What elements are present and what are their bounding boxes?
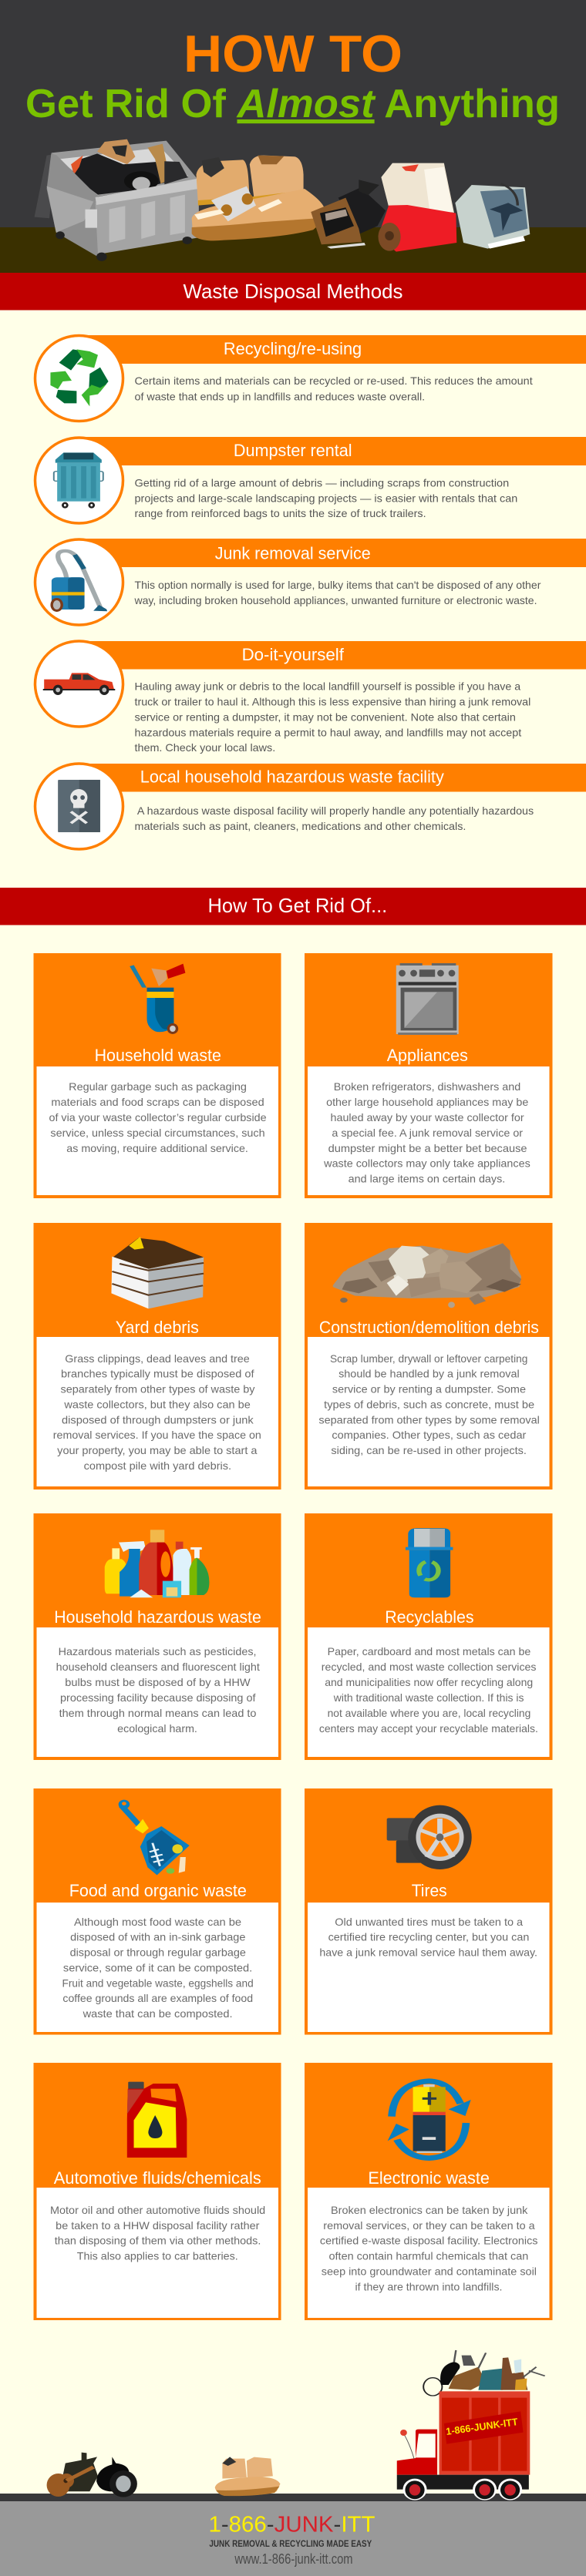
icon: vacuum bbox=[50, 551, 107, 612]
card: recyclables bbox=[305, 1513, 552, 1760]
method text: materials such as paint, cleaners, medications and other chemicals. bbox=[134, 820, 466, 832]
icon: tires and wheel bbox=[387, 1805, 472, 1869]
card text: household cleansers and fluorescent light bbox=[56, 1661, 260, 1673]
card title: Electronic waste bbox=[368, 2168, 490, 2188]
card text: service or by renting a dumpster. Some bbox=[332, 1382, 526, 1395]
illustration: junk removal truck bbox=[397, 2350, 545, 2500]
phone number: 1-866-JUNK-ITT bbox=[208, 2512, 376, 2537]
method: recycling/re-using bbox=[35, 335, 586, 421]
method title: Do-it-yourself bbox=[242, 645, 345, 664]
card: household hazardous waste bbox=[34, 1513, 281, 1760]
card text: than disposing of them via other methods. bbox=[55, 2235, 261, 2247]
icon: rubble pile bbox=[332, 1243, 521, 1308]
card: automotive fluids/chemicals bbox=[34, 2063, 281, 2320]
card: appliances bbox=[305, 953, 552, 1198]
method title: Junk removal service bbox=[215, 544, 371, 563]
card: construction/demolition debris bbox=[305, 1223, 552, 1490]
card text: Broken electronics can be taken by junk bbox=[331, 2204, 528, 2216]
card text: removal services, or they can be taken to a bbox=[323, 2219, 535, 2232]
dumpster bbox=[35, 139, 199, 261]
method text: projects and large-scale landscaping projects — is easier with rentals that can bbox=[134, 492, 517, 504]
card text: separated from other types by some removal bbox=[318, 1413, 540, 1426]
card text: disposal or through regular garbage bbox=[70, 1946, 246, 1959]
card text: your property, you may be able to start a bbox=[57, 1444, 258, 1456]
card text: bulbs must be disposed of by a HHW bbox=[65, 1676, 251, 1688]
card text: dumpster might be a better bet because bbox=[328, 1142, 527, 1154]
card text: waste that can be composted. bbox=[83, 2007, 233, 2020]
header panel bbox=[0, 0, 586, 273]
icon: toxic barrel bbox=[58, 780, 100, 832]
card text: types of debris, such as concrete, must be bbox=[324, 1398, 534, 1410]
method text: of waste that ends up in landfills and reduces waste overall. bbox=[134, 390, 425, 402]
card text: often contain harmful chemicals that can bbox=[328, 2250, 528, 2262]
method text bbox=[134, 374, 533, 402]
method text: way, including broken household appliances, unwanted furniture or electronic waste. bbox=[133, 594, 537, 606]
rolled carpet bbox=[379, 205, 456, 252]
tagline: JUNK REMOVAL & RECYCLING MADE EASY bbox=[209, 2538, 372, 2549]
card text: Fruit and vegetable waste, eggshells and bbox=[62, 1977, 254, 1990]
section heading: how to get rid of: How To Get Rid Of... bbox=[208, 894, 387, 917]
sofa bbox=[192, 156, 325, 240]
broken tv and garbage bag bbox=[311, 180, 386, 249]
method text: range from reinforced bags to units the size of truck trailers. bbox=[134, 507, 426, 519]
method text bbox=[134, 804, 534, 832]
card text: processing facility because disposing of bbox=[60, 1691, 256, 1704]
card text: compost pile with yard debris. bbox=[84, 1459, 231, 1472]
card text: disposed of with an in-sink garbage bbox=[70, 1931, 246, 1943]
card text bbox=[323, 1080, 530, 1185]
card text: Scrap lumber, drywall or leftover carpeting bbox=[330, 1352, 527, 1365]
card text bbox=[49, 1080, 267, 1154]
illustration: junk pile bbox=[35, 139, 530, 261]
method text bbox=[134, 680, 530, 754]
icon: cleaning bottles bbox=[105, 1530, 209, 1597]
method: do-it-yourself bbox=[35, 641, 586, 754]
icon: stove bbox=[396, 963, 459, 1035]
icon: battery with arrows bbox=[388, 2081, 471, 2158]
icon: dustpan bbox=[119, 1800, 190, 1875]
broken monitor bbox=[455, 183, 530, 249]
card text: removal services. If you have the space on bbox=[53, 1429, 261, 1441]
card text: service, some of it can be composted. bbox=[63, 1962, 252, 1974]
card text: certified e-waste disposal facility. Electronics bbox=[320, 2235, 538, 2247]
method text: them. Check your local laws. bbox=[134, 741, 275, 754]
card text: Grass clippings, dead leaves and tree bbox=[65, 1352, 250, 1365]
website: www.1-866-junk-itt.com bbox=[234, 2551, 353, 2567]
title: get rid of almost anything: Get Rid Of Almost Anything bbox=[25, 82, 560, 126]
truck sign text: 1-866-JUNK-ITT bbox=[445, 2416, 519, 2437]
icon: dumpster bbox=[54, 452, 103, 509]
card text: be taken to a HHW disposal facility rather bbox=[56, 2219, 260, 2232]
method text bbox=[134, 476, 517, 519]
method title: Recycling/re-using bbox=[224, 339, 362, 358]
card text: Old unwanted tires must be taken to a bbox=[335, 1916, 523, 1928]
card title: Food and organic waste bbox=[69, 1881, 247, 1900]
card text: siding, can be re-used in other projects. bbox=[331, 1444, 527, 1456]
title: how to: HOW TO bbox=[184, 25, 402, 83]
mattress bbox=[381, 163, 454, 213]
card text: Paper, cardboard and most metals can be bbox=[328, 1645, 531, 1657]
card text bbox=[50, 2204, 265, 2262]
card: yard debris bbox=[34, 1223, 281, 1490]
card text: with traditional waste collection. If this is bbox=[333, 1691, 524, 1704]
card title: Household hazardous waste bbox=[54, 1607, 261, 1627]
card text: materials and food scraps can be disposed bbox=[51, 1096, 264, 1108]
card text: have a junk removal service haul them away. bbox=[319, 1946, 537, 1959]
card text bbox=[318, 1352, 540, 1456]
card text: branches typically must be disposed of bbox=[61, 1367, 254, 1379]
card text bbox=[62, 1916, 254, 2020]
card text: Broken refrigerators, dishwashers and bbox=[334, 1080, 520, 1093]
card: tires bbox=[305, 1788, 552, 2034]
card title: Automotive fluids/chemicals bbox=[54, 2168, 261, 2188]
card text: if they are thrown into landfills. bbox=[355, 2281, 503, 2293]
junk load bbox=[423, 2350, 545, 2396]
method text: service or renting a dumpster, it may not be convenient. Note also that certain bbox=[134, 710, 516, 723]
method text: Hauling away junk or debris to the local landfill yourself is possible if you have a bbox=[134, 680, 520, 692]
card text bbox=[320, 2204, 538, 2293]
icon: pickup truck bbox=[43, 673, 115, 695]
card text: Although most food waste can be bbox=[74, 1916, 241, 1928]
card text: Regular garbage such as packaging bbox=[69, 1080, 247, 1093]
card text: Motor oil and other automotive fluids should bbox=[50, 2204, 265, 2216]
card title: Appliances bbox=[387, 1046, 468, 1065]
method text: hazardous materials require a permit to haul away, and landfills may not accept bbox=[134, 726, 521, 738]
illustration: sofa bbox=[215, 2457, 281, 2496]
method title: Dumpster rental bbox=[234, 441, 352, 460]
card text: disposed of through dumpsters or junk bbox=[62, 1413, 254, 1426]
card text bbox=[319, 1916, 537, 1959]
card title: Tires bbox=[412, 1881, 447, 1900]
card text: companies. Other types, such as cedar bbox=[332, 1429, 527, 1441]
card text: as moving, require additional service. bbox=[66, 1142, 248, 1154]
card text: coffee grounds all are examples of food bbox=[62, 1992, 253, 2004]
method text: Getting rid of a large amount of debris — including scraps from construction bbox=[134, 476, 509, 489]
card text: other large household appliances may be bbox=[326, 1096, 529, 1108]
card text: seep into groundwater and contaminate soil bbox=[322, 2265, 537, 2278]
card: household waste bbox=[34, 953, 281, 1198]
card title: Recyclables bbox=[385, 1607, 474, 1627]
card text: and large items on certain days. bbox=[349, 1173, 505, 1185]
card text: of via your waste collector’s regular curbside bbox=[49, 1111, 267, 1123]
card: electronic waste bbox=[305, 2063, 552, 2320]
method title: Local household hazardous waste facility bbox=[140, 767, 444, 786]
method text: A hazardous waste disposal facility will properly handle any potentially hazardous bbox=[137, 804, 534, 817]
method text: This option normally is used for large, bulky items that can't be disposed of any other bbox=[134, 579, 541, 591]
method: junk removal service bbox=[35, 539, 586, 625]
card text: service, unless special circumstances, such bbox=[50, 1127, 265, 1139]
card text: should be handled by a junk removal bbox=[338, 1367, 520, 1379]
card text: not available where you are, local recycling bbox=[328, 1707, 530, 1719]
card text: separately from other types of waste by bbox=[60, 1382, 254, 1395]
card text: This also applies to car batteries. bbox=[77, 2250, 238, 2262]
section heading: waste disposal methods bbox=[0, 273, 586, 310]
method text bbox=[133, 579, 541, 606]
card title: Construction/demolition debris bbox=[319, 1318, 539, 1337]
card text: hauled away by your waste collector for bbox=[330, 1111, 524, 1123]
icon: recycling bin bbox=[406, 1528, 453, 1597]
card text: recycled, and most waste collection services bbox=[322, 1661, 537, 1673]
card text: a special fee. A junk removal service or bbox=[332, 1127, 523, 1139]
card text: waste collectors, but they also can be bbox=[63, 1398, 251, 1410]
card text bbox=[56, 1645, 260, 1735]
card title: Yard debris bbox=[116, 1318, 199, 1337]
method: local household hazardous waste facility bbox=[35, 764, 586, 849]
icon: wheeled bin bbox=[130, 964, 185, 1034]
icon: motor oil jug bbox=[127, 2082, 187, 2158]
card text: certified tire recycling center, but you can bbox=[328, 1931, 529, 1943]
illustration: bags, guitar and tire bbox=[47, 2453, 137, 2497]
card text: them through normal means can lead to bbox=[59, 1707, 257, 1719]
method text: truck or trailer to haul it. Although this is less expensive than hiring a junk removal bbox=[134, 695, 530, 707]
card title: Household waste bbox=[95, 1046, 221, 1065]
section heading: how to get rid of bbox=[0, 888, 586, 925]
icon: compost bin bbox=[111, 1237, 204, 1308]
method: dumpster rental bbox=[35, 437, 586, 523]
card text bbox=[53, 1352, 261, 1472]
card text: and municipalities now offer recycling along bbox=[325, 1676, 533, 1688]
icon: recycle arrows bbox=[50, 349, 109, 406]
section heading: waste disposal methods: Waste Disposal Methods bbox=[184, 280, 402, 303]
footer panel bbox=[0, 2350, 586, 2576]
card text bbox=[319, 1645, 538, 1735]
card text: ecological harm. bbox=[117, 1722, 197, 1735]
card text: waste collectors may only take appliances bbox=[323, 1157, 530, 1170]
card text: Hazardous materials such as pesticides, bbox=[59, 1645, 256, 1657]
card text: centers may accept your recyclable materials. bbox=[319, 1722, 538, 1735]
card: food and organic waste bbox=[34, 1788, 281, 2034]
method text: Certain items and materials can be recycled or re-used. This reduces the amount bbox=[134, 374, 533, 387]
